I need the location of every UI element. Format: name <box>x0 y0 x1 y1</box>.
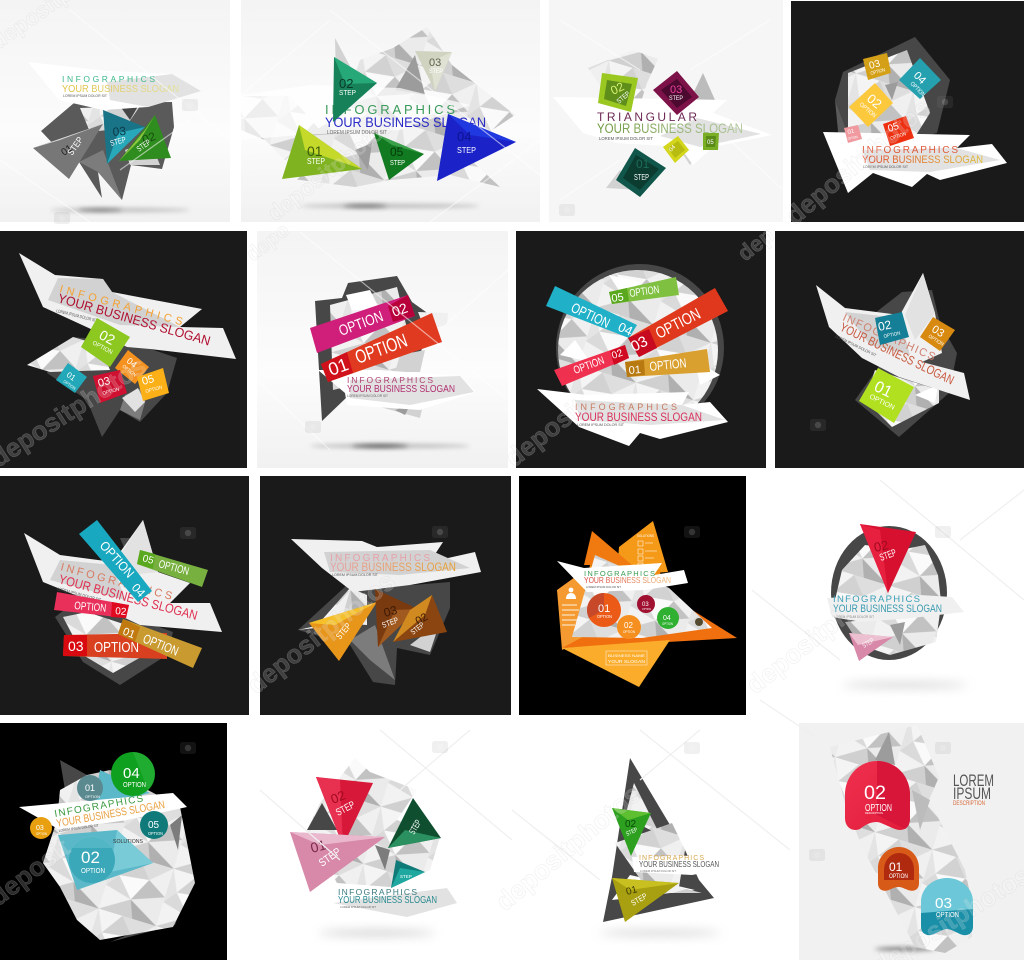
step 04 blue triangle: STEP <box>457 146 476 155</box>
circle 05: 05 <box>148 820 160 831</box>
ribbon 01: OPTION <box>649 355 687 374</box>
ribbon 03 <box>628 288 728 357</box>
watermark camera icons <box>54 96 953 861</box>
step 03 olive triangle <box>415 51 452 91</box>
ribbon 05: 05 <box>141 553 155 567</box>
banner with title <box>827 594 964 622</box>
ribbon 04: 04 <box>616 319 635 339</box>
ribbon 05 <box>137 550 208 587</box>
panel 13: black panel with crumple and circles <box>0 723 227 960</box>
ribbon 01 <box>625 349 710 377</box>
square 05 green <box>703 133 719 150</box>
panel 14: white panel with triangle steps <box>290 758 457 936</box>
step 03 teal triangle: STEP <box>109 135 127 148</box>
panel 9: dark panel with mixed ribbons <box>0 476 249 715</box>
banner with title <box>28 62 201 110</box>
step 02 green triangle: STEP <box>135 138 152 154</box>
shield 02 red: DESCRIPTION <box>865 812 883 815</box>
circle 04 <box>657 607 679 629</box>
circle 01: OPTION <box>85 794 100 799</box>
step 01 yellow triangle: STEP <box>630 891 649 908</box>
step 02 green triangle: 02 <box>625 819 637 830</box>
ribbon with title: LOREM IPSUM DOLOR SIT <box>56 308 98 323</box>
banner with title: YOUR BUSINESS SLOGAN <box>639 860 719 869</box>
step 04 teal triangle <box>391 860 425 888</box>
ribbon 04: OPTION <box>569 299 613 331</box>
square 05: OPTION <box>890 131 907 142</box>
square 03 red <box>93 370 127 403</box>
ribbon 01: OPTION <box>141 631 181 659</box>
watermark text: depositphotos <box>241 566 401 700</box>
crumple centre <box>572 555 712 638</box>
ribbon 04: 04 <box>129 581 148 600</box>
square 02 lime <box>598 73 638 112</box>
square 04 <box>899 58 941 99</box>
banner with title: YOUR BUSINESS SLOGAN <box>584 575 671 585</box>
banner with title: INFOGRAPHICS <box>639 855 704 862</box>
panel 5: dark panel with tilted title and squares <box>0 231 247 468</box>
step 02 green triangle <box>333 57 377 122</box>
square 04 orange <box>115 350 149 384</box>
circle 02: 02 <box>624 621 633 630</box>
shield 02 red: 02 <box>864 783 886 804</box>
solutions list: SOLUTIONS <box>637 534 655 538</box>
banner with title <box>291 539 481 592</box>
step 03 brown triangle <box>375 589 418 647</box>
banner with title: LOREM IPSUM DOLOR SIT <box>834 615 875 619</box>
ribbon with title: YOUR BUSINESS SLOGAN <box>57 571 199 623</box>
step 02 red triangle <box>860 524 916 593</box>
banner with title: INFOGRAPHICS <box>833 594 920 605</box>
banner with title: YOUR BUSINESS SLOGAN <box>575 410 702 424</box>
panel 7: dark panel with circle crumple and ribbons <box>516 231 766 468</box>
watermark text: deposit <box>499 392 591 473</box>
circle 02 <box>617 615 641 639</box>
panel 2: large triangle steps, blue slogan <box>241 0 540 222</box>
circle 01 <box>77 775 103 801</box>
title block <box>325 102 486 136</box>
banner with title <box>632 855 734 875</box>
panel 3: square steps, triangular title <box>549 0 783 222</box>
banner with title: LOREM IPSUM DOLOR SIT <box>63 93 107 98</box>
ribbon with title <box>19 253 236 359</box>
banner with title: LOREM IPSUM DOLOR SIT <box>59 823 99 833</box>
banner with title <box>19 793 187 833</box>
step 01 grey triangle <box>33 124 103 179</box>
title block: YOUR BUSINESS SLOGAN <box>325 114 486 130</box>
square 02 lime: 02 <box>608 79 627 98</box>
step 02 green triangle <box>612 808 651 856</box>
banner with title: INFOGRAPHICS <box>575 402 677 412</box>
banner with title <box>333 887 457 917</box>
square 02 lime: 02 <box>97 327 118 348</box>
step 05 dark green triangle: STEP <box>390 160 405 167</box>
ribbon 02: 02 <box>610 348 625 362</box>
square 01: 01 <box>847 129 856 136</box>
ribbon 04: OPTION <box>97 538 137 581</box>
step 04 blue triangle: 04 <box>457 129 471 144</box>
step 03 brown triangle: 03 <box>382 603 399 620</box>
square 02 lime: OPTION <box>91 340 113 356</box>
square 01 teal: OPTION <box>62 379 77 391</box>
square 02 lime: STEP <box>616 90 632 106</box>
step 02 green triangle <box>119 115 171 161</box>
business name box: BUSINESS NAME <box>608 653 645 658</box>
square 05 yellow: 05 <box>141 373 156 388</box>
solutions list <box>637 534 657 568</box>
circle 01: 01 <box>598 603 610 615</box>
business name box <box>606 651 647 665</box>
banner with title: YOUR BUSINESS SLOGAN <box>338 895 437 906</box>
panel 4: dark panel with colour squares <box>791 1 1024 222</box>
step 02 red triangle <box>316 777 373 846</box>
banner with title: YOUR BUSINESS SLOGAN <box>330 560 456 574</box>
step 02 red triangle: 02 <box>873 537 890 555</box>
panel 1: triangle steps, grey crumple <box>0 0 230 222</box>
square 01 teal <box>56 363 87 393</box>
banner with title: INFOGRAPHICS <box>338 887 417 897</box>
ribbon 05 <box>609 277 679 305</box>
step 03 olive triangle: 03 <box>429 57 441 69</box>
step 02 red triangle: 02 <box>329 787 348 807</box>
heading lorem ipsum: LOREM <box>953 771 994 790</box>
heading lorem ipsum: DESCRIPTION <box>953 801 985 807</box>
banner with title: INFOGRAPHICS <box>347 375 433 385</box>
circle 02: OPTION <box>81 868 105 875</box>
ribbon with title: LOREM IPSUM DOLOR SIT <box>863 164 908 169</box>
step 01 yellow triangle <box>612 878 679 922</box>
step 01 pink triangle <box>849 633 893 661</box>
solutions label: SOLUTIONS <box>113 839 143 845</box>
banner with title: LOREM IPSUM DOLOR SIT <box>332 572 378 577</box>
ribbon with title <box>24 520 222 632</box>
square 03 red: 03 <box>97 375 112 390</box>
ribbon 02 <box>54 592 129 618</box>
square 03 red: OPTION <box>102 387 120 397</box>
ribbon <box>553 97 772 165</box>
square 03 magenta: STEP <box>669 96 683 102</box>
ribbon option 01: 01 <box>326 354 351 380</box>
step 02 green triangle: 02 <box>339 76 353 91</box>
square 04 orange: OPTION <box>121 364 137 379</box>
banner with title: LOREM IPSUM DOLOR SIT <box>340 905 376 909</box>
step 05 dark green triangle: 05 <box>390 145 404 159</box>
step 03 dark green triangle: STEP <box>407 818 423 836</box>
circle 01 <box>587 593 621 627</box>
ribbon 05: 05 <box>611 291 625 305</box>
square 01 lime <box>859 368 914 423</box>
watermark text: depo <box>243 219 294 266</box>
shield 03 teal: OPTION <box>936 910 959 919</box>
square 05 yellow: OPTION <box>145 385 163 395</box>
square 01 dark green <box>616 148 666 197</box>
step 03 dark green triangle <box>388 798 441 848</box>
square 03 orange <box>920 317 955 351</box>
step 04 blue triangle <box>437 114 516 181</box>
step 05 dark green triangle <box>374 133 424 180</box>
ribbon with title: INFOGRAPHICS <box>862 145 958 156</box>
shield 01 orange: OPTION <box>889 873 908 880</box>
circle 03: 03 <box>642 602 649 608</box>
watermark text: dep <box>733 222 779 266</box>
step 01 pink triangle: STEP <box>317 846 343 869</box>
step 01 orange triangle: STEP <box>334 621 353 641</box>
square 03 orange: 03 <box>929 323 946 340</box>
title block: YOUR BUSINESS SLOGAN <box>597 121 743 136</box>
circle 03 <box>637 595 655 613</box>
ribbon with title: YOUR BUSINESS SLOGAN <box>838 320 956 387</box>
square 02 teal: 02 <box>877 317 893 334</box>
ribbon 01: 01 <box>121 626 137 641</box>
ribbon option 02: 02 <box>390 299 410 320</box>
banner with title: LOREM IPSUM DOLOR SIT <box>640 869 676 873</box>
square 05 green: 05 <box>707 140 714 146</box>
step 03 olive triangle: STEP <box>429 69 443 75</box>
square 04: OPTION <box>909 81 926 98</box>
business name box: YOUR SLOGAN <box>608 659 645 664</box>
banner with title: INFOGRAPHICS <box>584 569 655 578</box>
title block <box>597 110 743 141</box>
ribbon 04 <box>546 286 637 339</box>
banner with title: LOREM IPSUM DOLOR SIT <box>577 422 625 427</box>
circle 05: OPTION <box>148 831 163 836</box>
shield 01 orange: 01 <box>889 860 903 874</box>
banner with title: YOUR BUSINESS SLOGAN <box>62 84 179 95</box>
circle 03 <box>30 817 52 839</box>
square 03 <box>863 53 891 80</box>
square 01 lime: OPTION <box>868 394 895 412</box>
circle 03: 03 <box>36 825 44 832</box>
square 02: OPTION <box>858 102 877 119</box>
ribbon 02: OPTION <box>74 600 107 615</box>
ribbon option 01: OPTION <box>353 330 410 369</box>
panel 8: dark panel, tilted title with squares <box>775 231 1024 468</box>
step 01 yellow-green triangle: STEP <box>307 157 325 166</box>
panel 11: black panel with orange shapes and circles <box>519 476 746 715</box>
step 04 teal triangle: STEP <box>400 874 412 879</box>
circle 04: OPTION <box>123 782 146 789</box>
step 01 yellow-green triangle <box>282 125 362 179</box>
square 02: 02 <box>864 91 885 112</box>
banner with title: INFOGRAPHICS <box>54 793 144 820</box>
step 02 green triangle: STEP <box>625 827 639 838</box>
square 01 lime: 01 <box>871 378 895 401</box>
circle 04: 04 <box>123 765 140 782</box>
title block: INFOGRAPHICS <box>325 102 455 117</box>
ribbon with title: INFOGRAPHICS <box>841 312 937 363</box>
ribbon 05: OPTION <box>629 284 660 300</box>
watermark text: depositphotos <box>263 113 397 226</box>
circle 02: 02 <box>81 848 100 867</box>
step 02 brown triangle: 02 <box>414 611 430 628</box>
icon: people and description <box>562 588 579 625</box>
step 01 pink triangle: STEP <box>862 638 876 650</box>
square 05 <box>883 116 914 146</box>
circle 04 <box>111 752 155 796</box>
circle 02 <box>69 836 115 883</box>
banner with title: LOREM IPSUM DOLOR SIT <box>347 394 389 398</box>
ribbon 03 <box>63 633 167 659</box>
circle 03: OPTION <box>36 832 47 836</box>
ribbon 03: 03 <box>68 638 84 654</box>
square 04 yellow: 04 <box>668 144 678 153</box>
square 01 dark green: STEP <box>634 173 649 182</box>
square 03 magenta <box>653 71 699 115</box>
circle 01: 01 <box>85 783 95 793</box>
ribbon 02: OPTION <box>572 355 606 377</box>
banner with title <box>318 370 476 410</box>
ribbon 04 <box>79 520 152 602</box>
panel 6: light panel with option ribbons <box>257 231 508 468</box>
step 02 red triangle: STEP <box>334 799 357 819</box>
square 02 teal: OPTION <box>883 330 901 340</box>
heading lorem ipsum <box>953 771 994 807</box>
ribbon 01 <box>118 619 202 668</box>
square 04 orange: 04 <box>125 356 139 370</box>
square 01 teal: 01 <box>65 370 78 383</box>
step 02 brown triangle: STEP <box>409 620 426 637</box>
ribbon 03: 03 <box>628 333 651 356</box>
step 02 red triangle: STEP <box>878 548 898 564</box>
square 01: OPTION <box>847 135 858 141</box>
watermark text: depositphotos <box>490 778 646 917</box>
step 01 pink triangle: 01 <box>309 836 328 856</box>
ribbon 01: 01 <box>628 364 641 377</box>
ribbon option 02: OPTION <box>337 308 386 340</box>
ribbon with title <box>816 273 970 400</box>
title block: LOREM IPSUM DOLOR SIT <box>599 136 653 141</box>
banner with title: INFOGRAPHICS <box>330 553 430 564</box>
banner with title: INFOGRAPHICS <box>62 74 155 84</box>
square 03 orange: OPTION <box>927 334 945 348</box>
banner with title: YOUR BUSINESS SLOGAN <box>833 603 942 615</box>
square 02 lime <box>81 318 130 367</box>
step 01 yellow triangle: 01 <box>625 884 639 898</box>
panel 16: light panel with shield badges <box>799 723 1024 960</box>
title block: LOREM IPSUM DOLOR SIT <box>327 130 387 136</box>
banner with title <box>537 389 728 446</box>
square 03: 03 <box>868 58 882 72</box>
ribbon with title: YOUR BUSINESS SLOGAN <box>862 154 983 166</box>
panel 12: white panel with oval crumple <box>827 524 967 688</box>
square 03 magenta: 03 <box>670 84 682 96</box>
circle 02: OPTION <box>623 630 635 634</box>
banner with title <box>557 561 688 592</box>
step 03 brown triangle: STEP <box>381 616 400 630</box>
step 03 teal triangle: 03 <box>112 124 127 139</box>
ribbon 03: OPTION <box>94 639 139 656</box>
step 02 brown triangle <box>393 595 447 642</box>
shield 01 orange <box>878 847 919 891</box>
watermark text: depositphotos <box>780 92 936 231</box>
step 01 yellow-green triangle: 01 <box>307 143 323 159</box>
step 01 grey triangle: 01 <box>59 143 75 158</box>
square 02 <box>849 83 893 127</box>
square 03: OPTION <box>870 67 886 77</box>
square 04: 04 <box>911 70 928 87</box>
banner with title: YOUR BUSINESS SLOGAN <box>347 383 455 395</box>
shield 03 teal <box>921 878 973 935</box>
ribbon 05: OPTION <box>157 558 190 578</box>
step 01 orange triangle <box>309 602 377 661</box>
step 01 grey triangle: STEP <box>65 135 85 157</box>
square 01 <box>844 125 862 143</box>
square 05 yellow <box>137 368 169 401</box>
circle 05 <box>140 811 168 839</box>
step 02 green triangle: 02 <box>140 129 158 147</box>
title block: TRIANGULAR <box>597 110 697 124</box>
square 01 dark green: 01 <box>636 157 650 171</box>
ribbon option 01 <box>321 313 442 382</box>
ribbon option 02 <box>310 295 415 353</box>
step 01 pink triangle <box>290 832 385 892</box>
shield 02 red <box>845 761 910 830</box>
ribbon with title: INFOGRAPHICS <box>58 283 184 328</box>
ribbon with title <box>823 132 1007 193</box>
square 04 yellow <box>663 136 689 163</box>
ribbon with title: LOREM IPSUM DOLOR SIT <box>835 333 878 358</box>
ribbon with title: INFOGRAPHICS <box>59 561 173 603</box>
panel 15: white panel with triangle frame <box>600 758 734 936</box>
shield 03 teal: 03 <box>935 895 952 912</box>
square 02 teal <box>875 312 909 345</box>
ribbon 02: 02 <box>115 606 127 618</box>
circle 04: OPTION <box>662 622 674 626</box>
ribbon with title: YOUR BUSINESS SLOGAN <box>56 290 212 348</box>
circle 01: OPTION <box>597 614 612 619</box>
watermark text: depositph <box>740 600 857 700</box>
banner with title: LOREM IPSUM DOLOR SIT <box>586 585 621 589</box>
small circle <box>695 618 703 626</box>
ribbon 03: OPTION <box>653 306 704 343</box>
shield 02 red: OPTION <box>865 803 892 814</box>
square 05: 05 <box>887 121 901 135</box>
circle 03: OPTION <box>642 607 651 611</box>
circle 04: 04 <box>663 615 671 622</box>
step 02 green triangle: STEP <box>339 90 356 97</box>
ribbon 02 <box>554 345 629 386</box>
banner with title: YOUR BUSINESS SLOGAN <box>55 799 166 830</box>
panel 10: dark panel with orange and brown triangles <box>260 476 511 715</box>
ribbon with title: LOREM IPSUM DOLOR SIT <box>57 586 102 603</box>
heading lorem ipsum: IPSUM <box>953 784 991 803</box>
step 03 teal triangle <box>103 110 145 164</box>
